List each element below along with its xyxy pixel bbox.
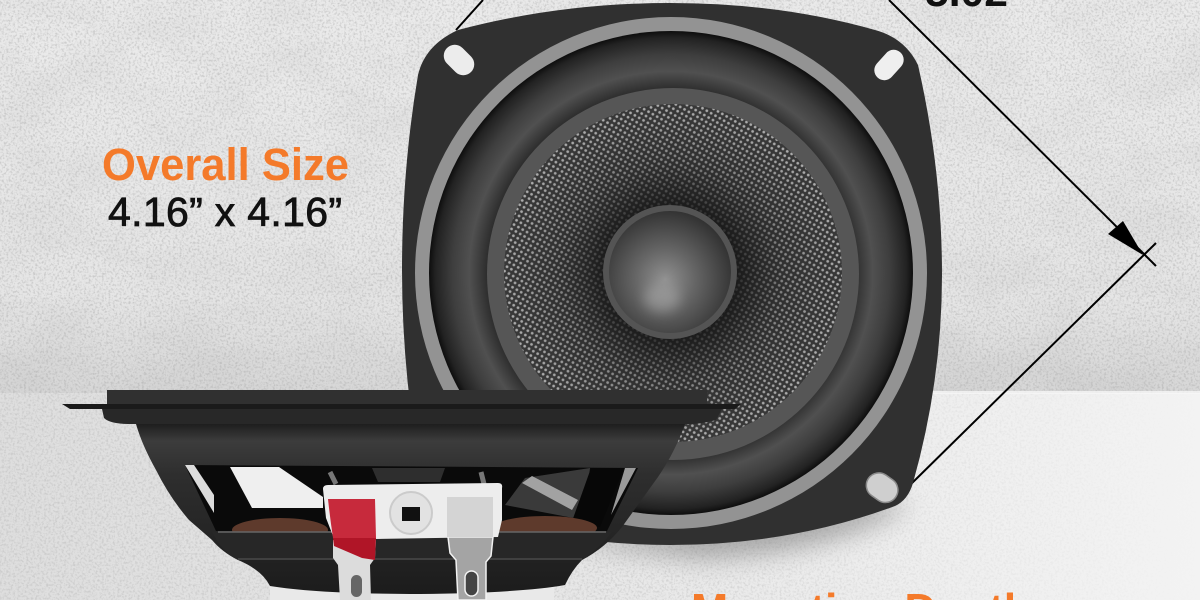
mounting hole top left <box>439 40 479 80</box>
terminal board <box>323 483 502 539</box>
label: overall size <box>102 139 349 235</box>
window light sliver <box>185 465 214 513</box>
speaker front view <box>402 3 942 545</box>
copper coil left <box>232 518 328 542</box>
basket window <box>185 465 638 531</box>
red positive marker <box>328 499 376 538</box>
centre eyelet <box>390 492 432 534</box>
basket <box>136 424 685 594</box>
window visible surround <box>505 468 590 520</box>
concrete wall background <box>0 0 1200 395</box>
right tab slot <box>465 571 478 596</box>
negative terminal pad <box>447 497 493 537</box>
dust cap highlight <box>644 284 680 312</box>
terminal wires <box>330 472 484 484</box>
red marker lower part <box>333 538 376 560</box>
mounting frame <box>402 3 942 545</box>
right light sliver <box>611 468 636 515</box>
dust cap <box>609 211 731 333</box>
top plate <box>107 390 707 404</box>
flange lip <box>102 409 722 424</box>
basket stripe <box>238 558 582 560</box>
cone shading <box>504 104 842 442</box>
surround roll <box>429 31 913 515</box>
magnet <box>270 586 554 600</box>
cone ring <box>487 88 859 460</box>
window bottom edge <box>218 531 606 533</box>
eyelet square hole <box>402 507 420 521</box>
basket bottom band <box>212 532 612 560</box>
window background gap <box>230 467 323 508</box>
value: 4.16” x 4.16” <box>108 189 342 235</box>
left tab slot <box>351 575 362 597</box>
speaker side view <box>62 390 741 600</box>
heading: Overall Size <box>102 139 349 190</box>
right strut <box>570 468 624 527</box>
dimension arrow: mounting diameter <box>456 0 1156 487</box>
positive tab <box>333 540 376 600</box>
speaker floor shadow <box>560 500 910 558</box>
copper coil right <box>493 516 597 540</box>
outer gasket ring <box>415 17 927 529</box>
centre basket arc <box>372 468 445 482</box>
dust cap rim <box>603 205 737 339</box>
mesh cone <box>504 104 842 442</box>
flange <box>62 404 741 409</box>
visible gasket <box>522 476 578 510</box>
negative tab <box>448 537 493 600</box>
mounting hole bottom right <box>861 468 903 507</box>
mounting hole top right <box>870 46 908 84</box>
terminal strip <box>323 472 502 600</box>
concrete floor background <box>0 391 1200 600</box>
